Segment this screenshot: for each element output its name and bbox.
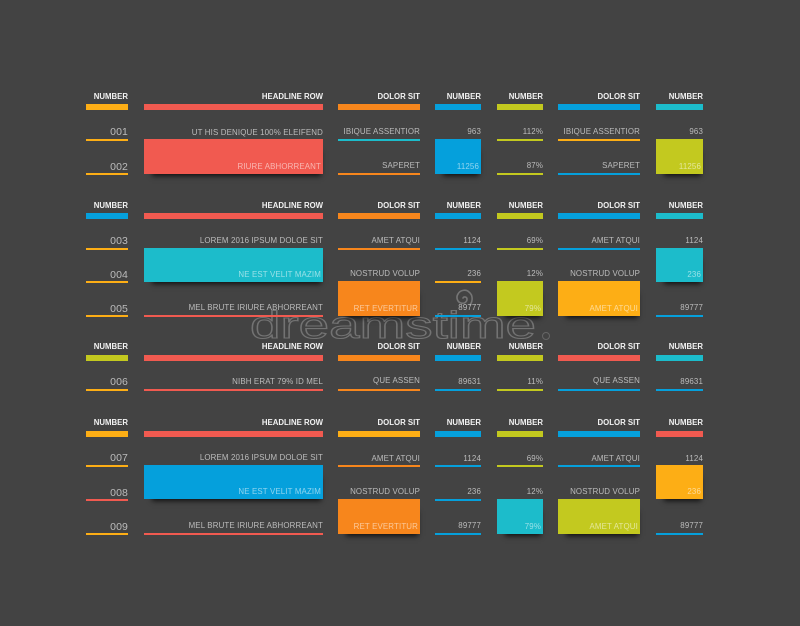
headings row 1: HEADLINE ROW [262, 92, 323, 101]
headings row 3: NUMBER [669, 342, 703, 351]
rows 007 to 009: 009 [110, 521, 128, 533]
rows 001 and 002: 963 [467, 127, 481, 136]
rows 001 and 002: 001 [110, 126, 128, 138]
headings row 3: NUMBER [94, 342, 128, 351]
headings row 3: DOLOR SIT [378, 342, 420, 351]
rows 001 and 002: 963 [689, 127, 703, 136]
rows 003 to 005: LOREM 2016 IPSUM DOLOE SIT [200, 236, 323, 245]
rows 007 to 009: AMET ATQUI [591, 454, 640, 463]
rows 003 to 005: 236 [467, 269, 481, 278]
rows 003 to 005: 69% [527, 236, 543, 245]
rows 007 to 009: 236 [687, 487, 701, 496]
rows 007 to 009: AMET ATQUI [589, 522, 638, 531]
headings row 4: NUMBER [669, 418, 703, 427]
rows 003 to 005: AMET ATQUI [589, 304, 638, 313]
headings row 1: DOLOR SIT [378, 92, 420, 101]
icon: watermark spiral [457, 290, 472, 305]
rows 003 to 005: RET EVERTITUR [354, 304, 418, 313]
rows 001 and 002: UT HIS DENIQUE 100% ELEIFEND [192, 128, 323, 137]
rows 003 to 005: 1124 [463, 236, 481, 245]
rows 007 to 009: 008 [110, 487, 128, 499]
rows 001 and 002: 11256 [457, 162, 479, 171]
watermark [250, 289, 550, 347]
rows 007 to 009: 236 [467, 487, 481, 496]
icon: registered mark [542, 332, 550, 340]
headings row 1: NUMBER [447, 92, 481, 101]
headings row 1: NUMBER [94, 92, 128, 101]
rows 003 to 005: AMET ATQUI [371, 236, 420, 245]
headings row 2: NUMBER [669, 201, 703, 210]
rows 001 and 002: 002 [110, 161, 128, 173]
headings row 4: NUMBER [509, 418, 543, 427]
row 006: 11% [527, 377, 543, 386]
rows 003 to 005: 236 [687, 270, 701, 279]
headings row 2: NUMBER [447, 201, 481, 210]
row 006: 89631 [458, 377, 481, 386]
headings row 4: HEADLINE ROW [262, 418, 323, 427]
headings row 2: NUMBER [94, 201, 128, 210]
row 006: QUE ASSEN [373, 376, 420, 385]
rows 007 to 009: AMET ATQUI [371, 454, 420, 463]
rows 003 to 005: 1124 [685, 236, 703, 245]
headings row 3: HEADLINE ROW [262, 342, 323, 351]
rows 003 to 005: NOSTRUD VOLUP [570, 269, 640, 278]
rows 003 to 005: 004 [110, 269, 128, 281]
rows 007 to 009: RET EVERTITUR [354, 522, 418, 531]
rows 007 to 009: 79% [525, 522, 541, 531]
rows 003 to 005: 005 [110, 303, 128, 315]
rows 007 to 009: NOSTRUD VOLUP [350, 487, 420, 496]
rows 007 to 009: 89777 [680, 521, 703, 530]
rows 007 to 009: MEL BRUTE IRIURE ABHORREANT [189, 521, 323, 530]
headings row 3: NUMBER [509, 342, 543, 351]
rows 001 and 002: SAPERET [602, 161, 640, 170]
headings row 3: NUMBER [447, 342, 481, 351]
rows 003 to 005: 89777 [680, 303, 703, 312]
rows 007 to 009: NOSTRUD VOLUP [570, 487, 640, 496]
watermark text: dreamstime [250, 305, 536, 347]
rows 001 and 002: 87% [527, 161, 543, 170]
row 006: 006 [110, 376, 128, 388]
rows 007 to 009: 12% [527, 487, 543, 496]
rows 003 to 005: 79% [525, 304, 541, 313]
rows 001 and 002: IBIQUE ASSENTIOR [343, 127, 420, 136]
headings row 3: DOLOR SIT [598, 342, 640, 351]
rows 003 to 005: 003 [110, 235, 128, 247]
headings row 1: DOLOR SIT [598, 92, 640, 101]
headings row 2: DOLOR SIT [598, 201, 640, 210]
rows 001 and 002: SAPERET [382, 161, 420, 170]
headings row 4: NUMBER [94, 418, 128, 427]
rows 001 and 002: RIURE ABHORREANT [237, 162, 321, 171]
headings row 4: DOLOR SIT [378, 418, 420, 427]
rows 007 to 009: 007 [110, 452, 128, 464]
headings row 1: NUMBER [669, 92, 703, 101]
rows 007 to 009: NE EST VELIT MAZIM [238, 487, 321, 496]
rows 007 to 009: 1124 [685, 454, 703, 463]
rows 007 to 009: LOREM 2016 IPSUM DOLOE SIT [200, 453, 323, 462]
rows 003 to 005: 89777 [458, 303, 481, 312]
rows 003 to 005: 12% [527, 269, 543, 278]
rows 001 and 002: IBIQUE ASSENTIOR [563, 127, 640, 136]
headings row 2: DOLOR SIT [378, 201, 420, 210]
headings row 1: NUMBER [509, 92, 543, 101]
rows 003 to 005: NOSTRUD VOLUP [350, 269, 420, 278]
rows 003 to 005: AMET ATQUI [591, 236, 640, 245]
rows 007 to 009: 69% [527, 454, 543, 463]
headings row 4: NUMBER [447, 418, 481, 427]
rows 003 to 005: NE EST VELIT MAZIM [238, 270, 321, 279]
row 006: NIBH ERAT 79% ID MEL [232, 377, 323, 386]
rows 001 and 002: 112% [523, 127, 543, 136]
row 006: 89631 [680, 377, 703, 386]
rows 001 and 002: 11256 [679, 162, 701, 171]
rows 007 to 009: 1124 [463, 454, 481, 463]
rows 007 to 009: 89777 [458, 521, 481, 530]
row 006: QUE ASSEN [593, 376, 640, 385]
headings row 2: HEADLINE ROW [262, 201, 323, 210]
headings row 2: NUMBER [509, 201, 543, 210]
headings row 4: DOLOR SIT [598, 418, 640, 427]
rows 003 to 005: MEL BRUTE IRIURE ABHORREANT [189, 303, 323, 312]
